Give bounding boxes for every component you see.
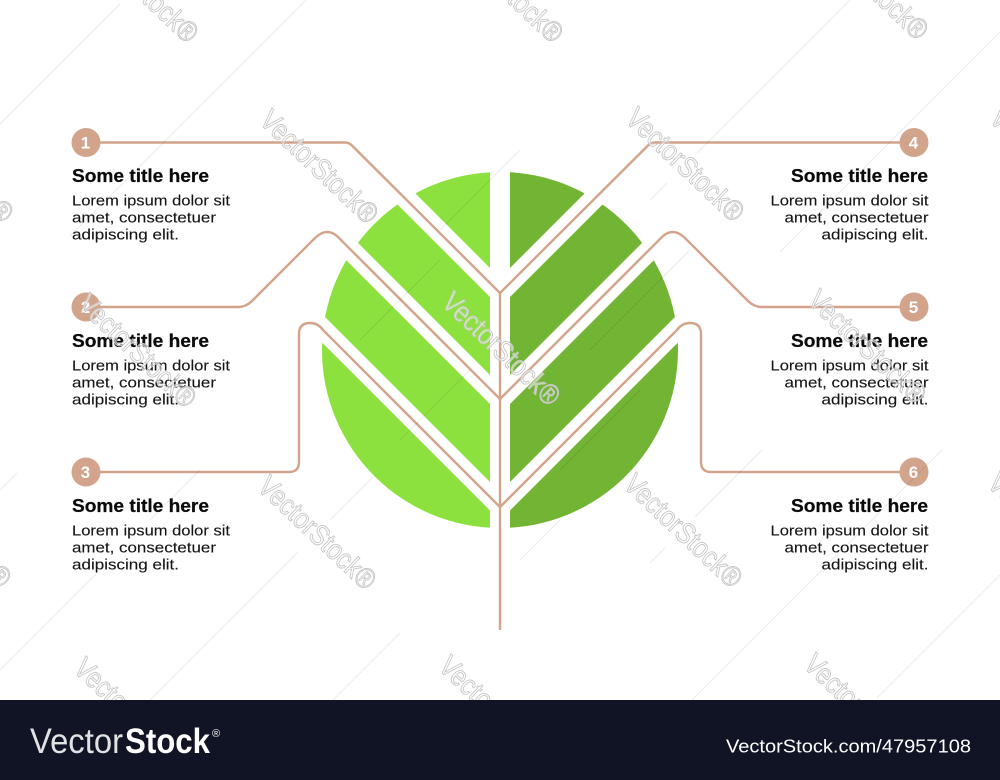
item 3: Some title here bbox=[72, 495, 209, 516]
item 6: Some title here bbox=[791, 495, 928, 516]
item 1 bbox=[72, 128, 230, 244]
leaf right half bbox=[510, 172, 678, 528]
item 1: 1 bbox=[81, 134, 90, 152]
item 1: Some title here bbox=[72, 165, 209, 186]
item 5: 5 bbox=[909, 298, 918, 317]
item 4: 4 bbox=[909, 134, 919, 152]
item 4: Lorem ipsum dolor sit bbox=[770, 194, 928, 210]
footer bar bbox=[0, 700, 1000, 780]
item 6: adipiscing elit. bbox=[822, 558, 928, 574]
item 6: amet, consectetuer bbox=[784, 540, 929, 556]
footer bar: VectorStock.com/47957108 bbox=[726, 736, 971, 756]
connector lines and stem bbox=[86, 142, 914, 630]
watermark: VectorStock® bbox=[801, 284, 932, 411]
item 5: adipiscing elit. bbox=[822, 392, 928, 408]
item 4 bbox=[770, 128, 929, 244]
item 4: Some title here bbox=[791, 165, 928, 186]
item 6 bbox=[770, 458, 929, 574]
item 2: Some title here bbox=[72, 330, 209, 351]
item 2: 2 bbox=[81, 298, 90, 317]
footer bar: ® bbox=[212, 728, 220, 740]
watermark: VectorStock® bbox=[71, 288, 202, 415]
item 3: amet, consectetuer bbox=[72, 540, 216, 556]
item 1: adipiscing elit. bbox=[72, 228, 179, 244]
item 5: Lorem ipsum dolor sit bbox=[770, 358, 928, 374]
leaf left half bbox=[322, 172, 490, 528]
item 3 bbox=[72, 458, 230, 574]
item 4: adipiscing elit. bbox=[822, 228, 928, 244]
item 5: amet, consectetuer bbox=[784, 376, 929, 392]
watermark: VectorStock® bbox=[617, 468, 748, 595]
item 4: amet, consectetuer bbox=[784, 210, 929, 226]
item 6: Lorem ipsum dolor sit bbox=[770, 524, 928, 540]
item 5: Some title here bbox=[791, 330, 928, 351]
item 3: adipiscing elit. bbox=[72, 558, 179, 574]
item 2: amet, consectetuer bbox=[72, 376, 216, 392]
footer bar: Vector bbox=[30, 722, 123, 761]
item 2: Lorem ipsum dolor sit bbox=[72, 358, 230, 374]
watermark: VectorStock® bbox=[251, 470, 382, 597]
item 5 bbox=[770, 292, 929, 408]
item 3: 3 bbox=[81, 463, 90, 482]
item 6: 6 bbox=[909, 463, 918, 482]
watermark: VectorStock® bbox=[435, 286, 566, 413]
item 2: adipiscing elit. bbox=[72, 392, 179, 408]
watermark: VectorStock® bbox=[253, 104, 384, 231]
item 1: Lorem ipsum dolor sit bbox=[72, 194, 230, 210]
footer bar: Stock bbox=[125, 722, 210, 761]
item 3: Lorem ipsum dolor sit bbox=[72, 524, 230, 540]
item 1: amet, consectetuer bbox=[72, 210, 216, 226]
item 2 bbox=[72, 292, 230, 408]
watermark: VectorStock® bbox=[619, 102, 750, 229]
